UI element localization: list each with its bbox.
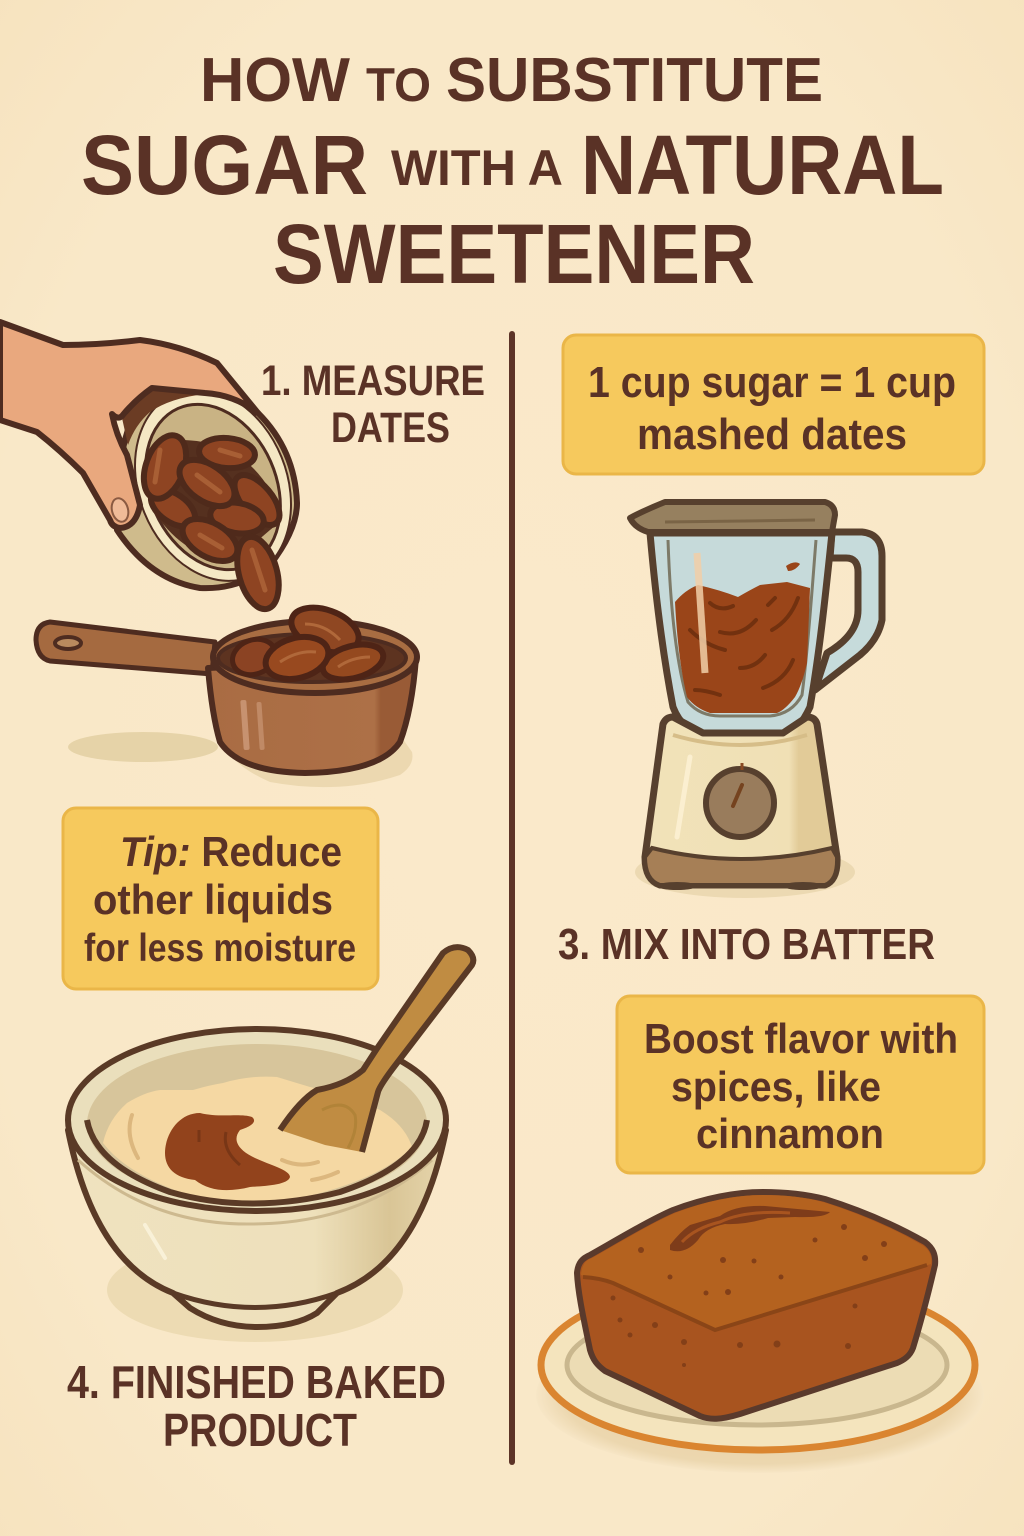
title: WITH A [391,140,563,196]
icon: mixing bowl with spoon [68,947,473,1342]
step 3 heading: mix into batter: 3. MIX INTO BATTER [558,920,935,969]
title: SUBSTITUTE [446,46,823,115]
callout: tip: other liquids [93,876,333,923]
step 4 heading: finished baked product: PRODUCT [163,1404,357,1456]
step 4 heading: finished baked product [67,1356,446,1456]
callout: spices: cinnamon [696,1110,884,1157]
step 4 heading: finished baked product: 4. FINISHED BAKED [67,1356,446,1408]
step 1 heading: measure dates [261,357,485,452]
callout: ratio: mashed dates [637,410,907,459]
callout: ratio [563,335,984,474]
center divider line [509,331,515,1465]
callout: spices: spices, like [671,1063,881,1110]
callout: ratio: 1 cup sugar = 1 cup [588,358,956,407]
icon: loaf of bread on plate [536,1192,984,1473]
icon: measuring cup with dates [36,599,417,787]
icon: blender [630,502,882,898]
title: HOW [200,46,350,115]
title: TO [366,58,431,111]
icon: hand pouring dates from a bowl [0,322,319,614]
callout: tip: Tip: Reduce [120,828,342,875]
title: SUGAR [81,118,368,212]
callout: spices: Boost flavor with [644,1015,958,1062]
step 1 heading: measure dates: 1. MEASURE [261,357,485,405]
callout: spices [617,996,984,1173]
title [81,46,944,301]
title: SWEETENER [273,207,755,301]
callout: tip [63,808,378,989]
step 1 heading: measure dates: DATES [331,404,450,452]
callout: tip: for less moisture [84,927,356,970]
title: NATURAL [581,118,944,212]
